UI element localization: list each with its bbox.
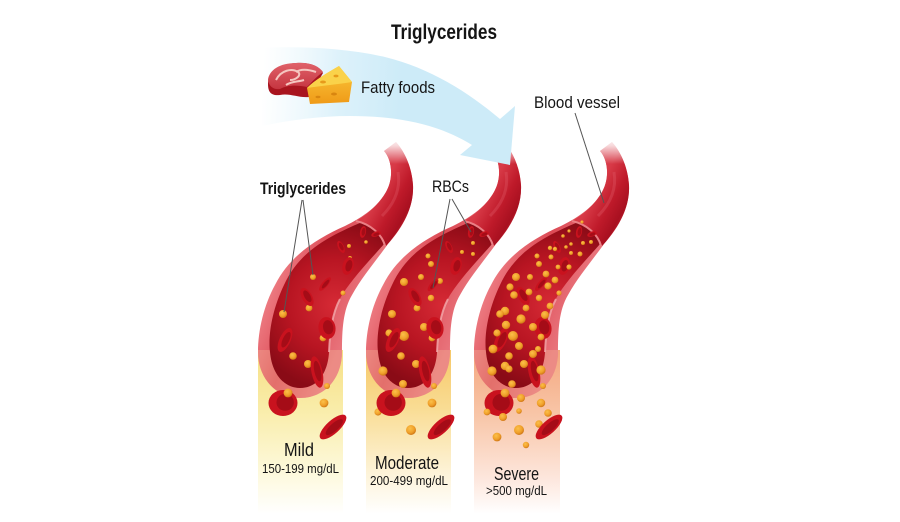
arrow: fatty foods into blood vessel: [262, 47, 515, 165]
label: moderate level: [370, 453, 448, 488]
label: triglycerides: Triglycerides: [260, 179, 346, 198]
red blood cells: severe: [484, 226, 598, 416]
red blood cell: severe, lower right: [532, 411, 566, 443]
label: mild level: [262, 440, 339, 476]
triglyceride particles: moderate: [374, 241, 475, 435]
label: fatty foods: Fatty foods: [361, 78, 435, 97]
triglyceride particles: severe: [484, 220, 593, 448]
label: blood vessel: Blood vessel: [534, 93, 620, 112]
band: mild severity: [258, 350, 343, 514]
label: moderate level: Moderate: [375, 453, 439, 473]
label: severe level: Severe: [494, 464, 539, 484]
label: mild level: 150-199 mg/dL: [262, 461, 339, 476]
blood vessel: moderate: [366, 136, 526, 443]
red blood cells: mild: [268, 226, 382, 443]
blood vessel: severe: [474, 136, 634, 448]
label: RBCs: RBCs: [432, 177, 469, 196]
icon: cheese wedge: [307, 66, 352, 104]
band: moderate severity: [366, 350, 451, 514]
label: severe level: >500 mg/dL: [486, 483, 547, 498]
leader line: blood vessel: [575, 113, 604, 203]
triglyceride particles: mild: [279, 240, 368, 407]
label: severe level: [486, 464, 547, 498]
blood vessel: mild: [258, 136, 418, 443]
label: moderate level: 200-499 mg/dL: [370, 473, 448, 488]
leader lines: triglycerides: [284, 200, 313, 312]
leader lines: RBCs: [433, 199, 471, 288]
label: mild level: Mild: [284, 440, 314, 460]
icon: raw meat: [268, 63, 323, 97]
band: severe severity: [474, 350, 560, 514]
red blood cells: moderate: [376, 226, 490, 443]
title: Triglycerides: [391, 21, 497, 44]
